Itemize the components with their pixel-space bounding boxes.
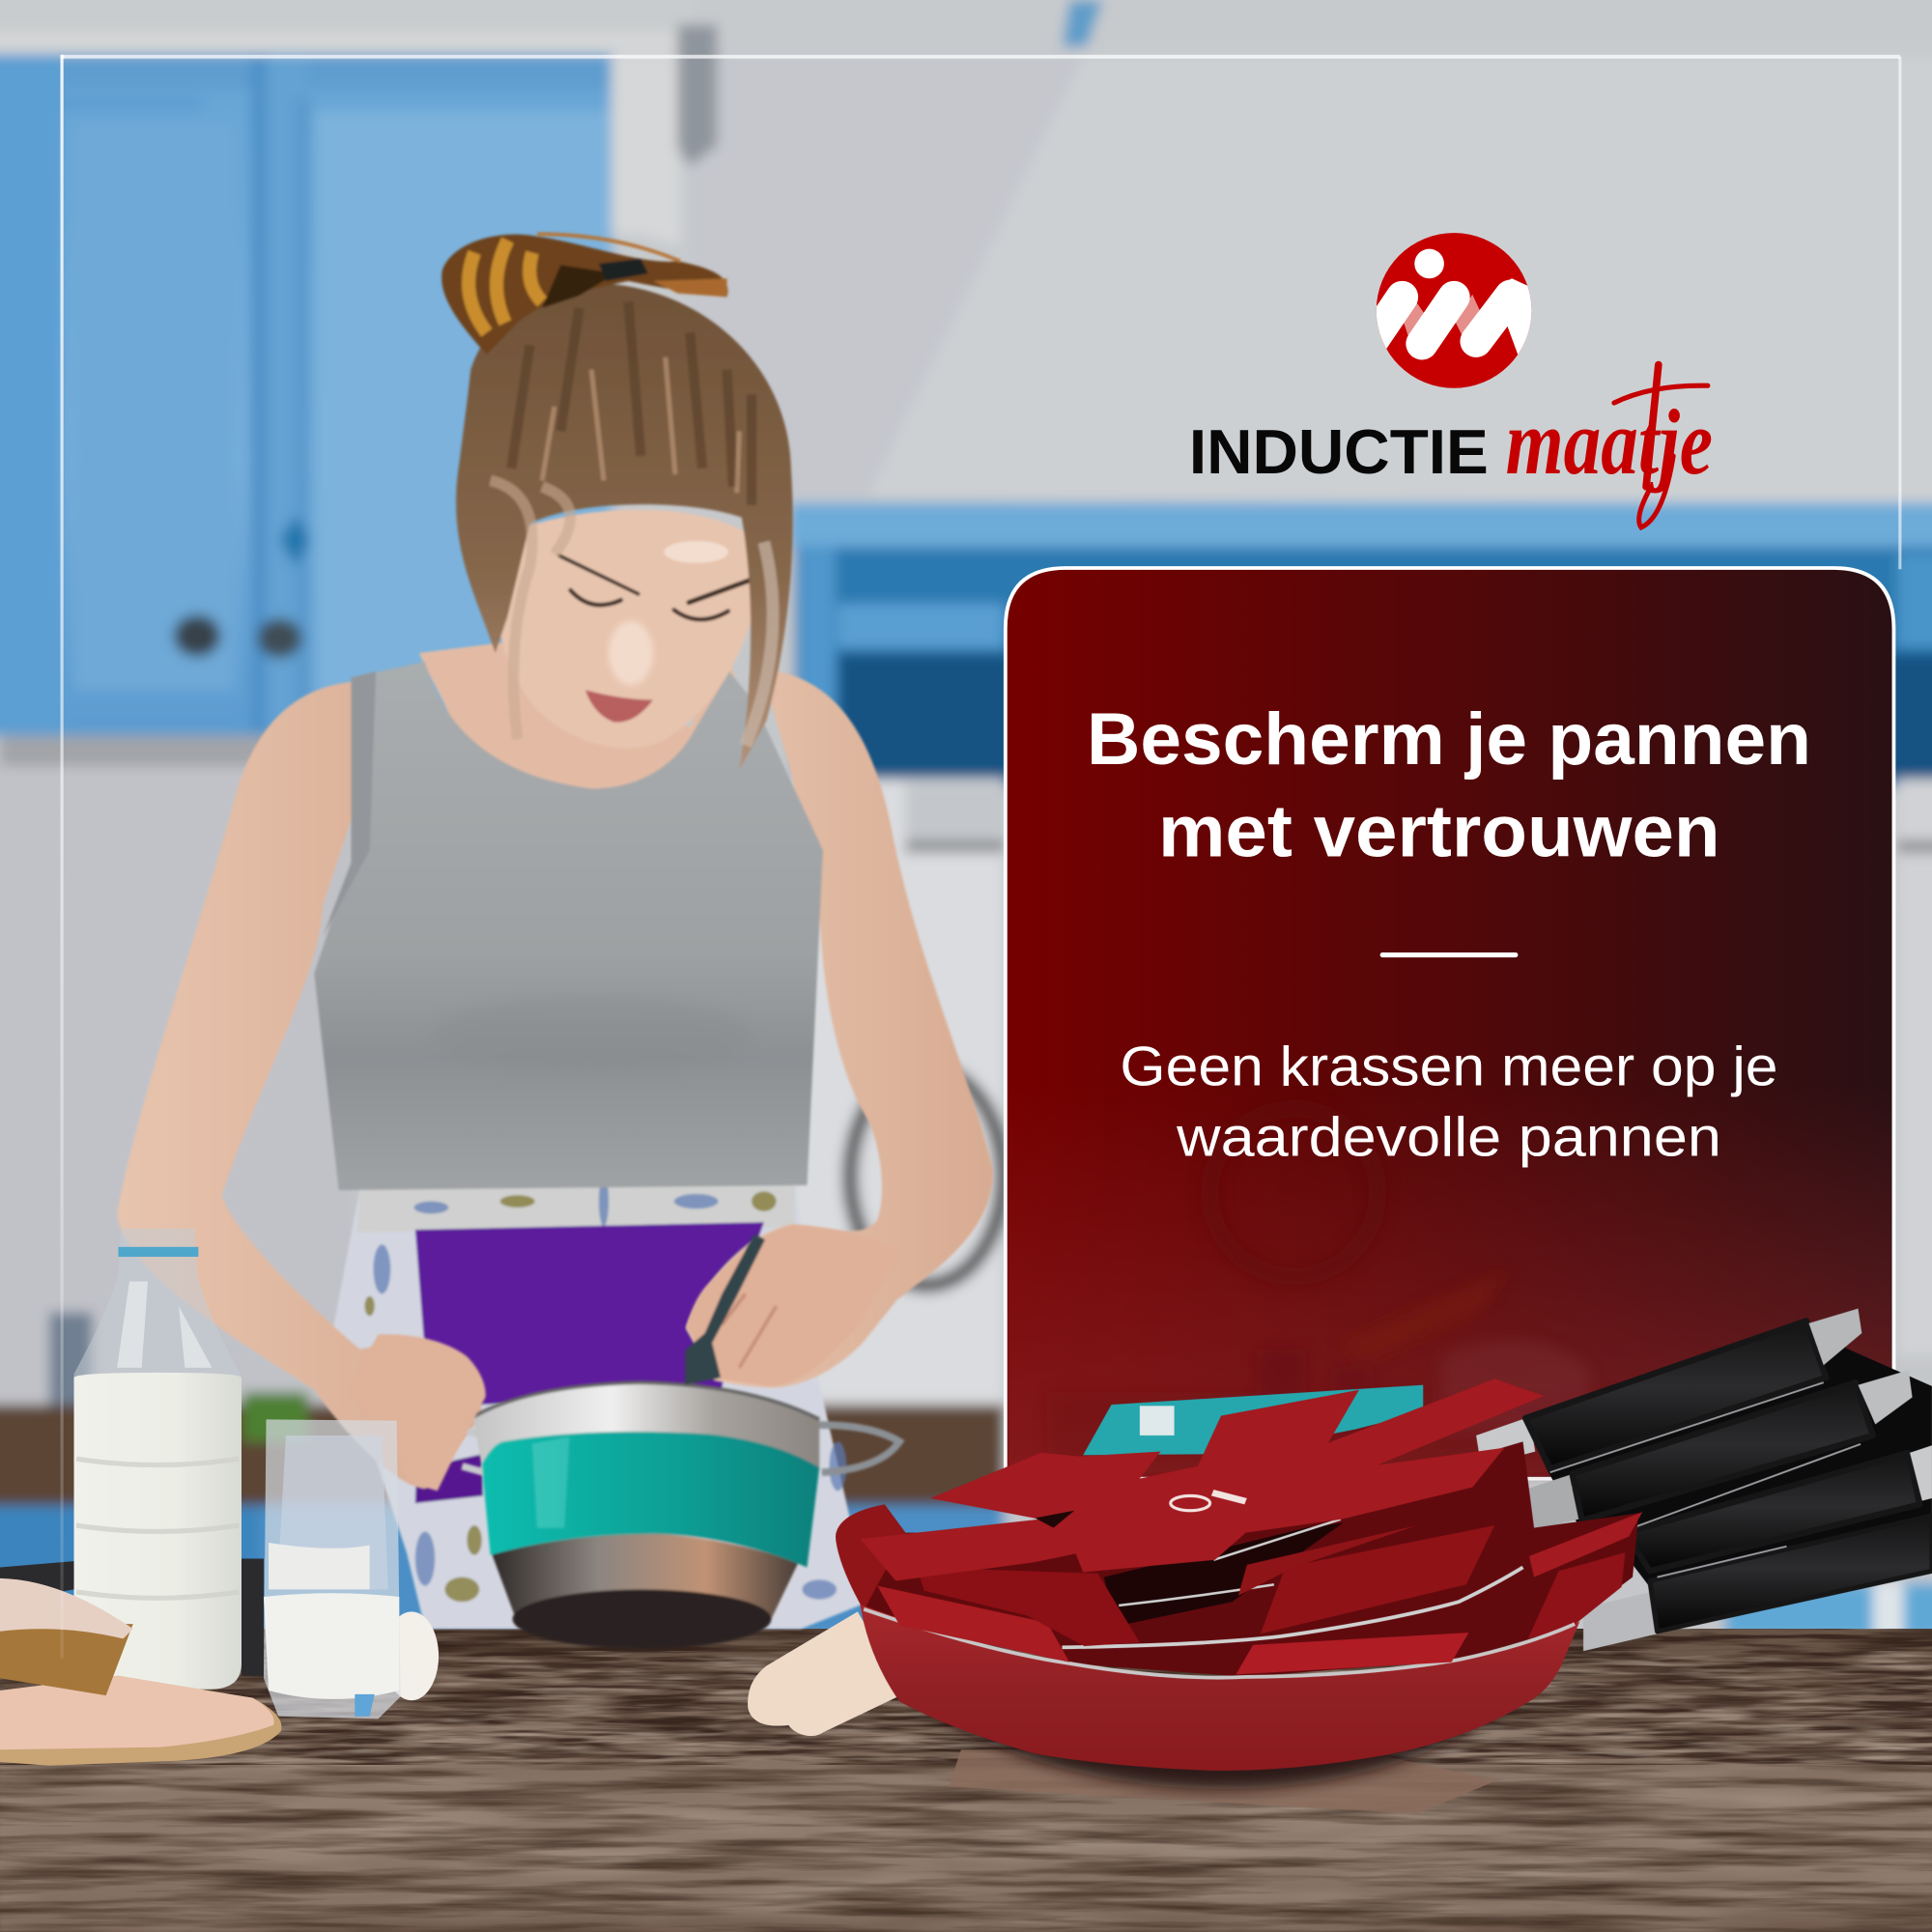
left hand: [345, 1334, 486, 1491]
inner dark stack: [864, 1441, 1638, 1677]
lips: [585, 690, 653, 723]
bottle of milk: [74, 1229, 242, 1690]
handle 2: [1573, 1370, 1913, 1520]
subheading: [1120, 1037, 1778, 1168]
glass of milk: [264, 1419, 401, 1719]
handle 1 neck: [1476, 1417, 1535, 1466]
handle 4: [1650, 1516, 1932, 1632]
purple pocket: [415, 1222, 764, 1503]
muffin: [0, 1578, 133, 1695]
logo: [1189, 233, 1713, 527]
script wordmark: maatje: [1506, 390, 1713, 494]
panel background: [1006, 568, 1893, 1479]
pan rims: [1062, 1520, 1523, 1647]
handle 1: [1525, 1309, 1861, 1468]
spatula: [685, 1235, 765, 1385]
counter: [0, 1405, 1005, 1506]
pot body: [473, 1382, 819, 1468]
egg: [384, 1611, 439, 1700]
wooden table: [0, 1629, 1932, 1932]
panel lower glow: [1008, 1084, 1891, 1476]
handle 2 neck: [1513, 1472, 1583, 1534]
cutting board: [0, 1676, 281, 1766]
heading: Bescherm je pannen: [1087, 698, 1811, 781]
divider: [1380, 952, 1518, 957]
handle 4 neck: [1583, 1592, 1658, 1651]
subheading: waardevolle pannen: [1176, 1106, 1721, 1168]
hair bun: [441, 234, 727, 355]
eyes and brows: [559, 555, 753, 619]
lower wall: [0, 735, 357, 1410]
left handle: [450, 1427, 487, 1472]
pan shadow on table: [918, 1707, 1509, 1789]
package: teal: [1083, 1385, 1423, 1455]
handle 3: [1625, 1445, 1932, 1571]
panel: message card: [1006, 568, 1893, 1479]
blurred reflections: [1047, 1109, 1602, 1472]
heading: [1087, 698, 1811, 872]
felt protector: flap dark: [917, 1567, 1140, 1646]
left arm: [117, 681, 483, 1489]
face: [491, 510, 760, 748]
outer felt curl: [836, 1504, 918, 1610]
silver gaps: [1550, 1382, 1861, 1577]
felt protector: strip: [1238, 1525, 1417, 1596]
neck and chest: [419, 640, 752, 813]
cooking pot with hands: [345, 1225, 899, 1649]
teal band: [482, 1432, 819, 1567]
table patch under pan: [949, 1749, 1497, 1814]
script flourish: [1614, 365, 1708, 527]
stove: [788, 779, 1005, 1410]
heading: met vertrouwen: [1158, 790, 1720, 872]
top moulding: [0, 0, 696, 54]
plate behind: [0, 1559, 264, 1676]
right hand: [686, 1225, 899, 1386]
woman: [117, 234, 993, 1629]
apron: [332, 1177, 868, 1629]
frame lines: [60, 57, 1900, 1659]
felt protector: flap left: [877, 1586, 1069, 1662]
right arm: [686, 669, 993, 1388]
cooker hood: [868, 57, 1932, 508]
black handle backing: [1528, 1321, 1932, 1597]
right handle: [786, 1425, 899, 1472]
frying pan bowl: [860, 1605, 1579, 1771]
side felt: [1529, 1512, 1642, 1577]
rolling pin: [748, 1611, 906, 1736]
wordmark: INDUCTIE: [1189, 416, 1489, 487]
logo mark: [1353, 233, 1540, 388]
grey tank top: [314, 662, 823, 1190]
felt brand mark: [1171, 1490, 1247, 1511]
felt protector: flap front: [1236, 1633, 1468, 1674]
hair: [456, 283, 793, 770]
bowl rim: [864, 1609, 1575, 1678]
pan stack: [836, 1309, 1932, 1814]
felt protector: flap centre: [1261, 1525, 1494, 1634]
subheading: Geen krassen meer op je: [1120, 1037, 1778, 1098]
pot base: [513, 1589, 771, 1649]
blue cabinets: [0, 54, 612, 735]
felt protector: top star: [860, 1378, 1544, 1580]
blue shelf: [788, 502, 1932, 547]
